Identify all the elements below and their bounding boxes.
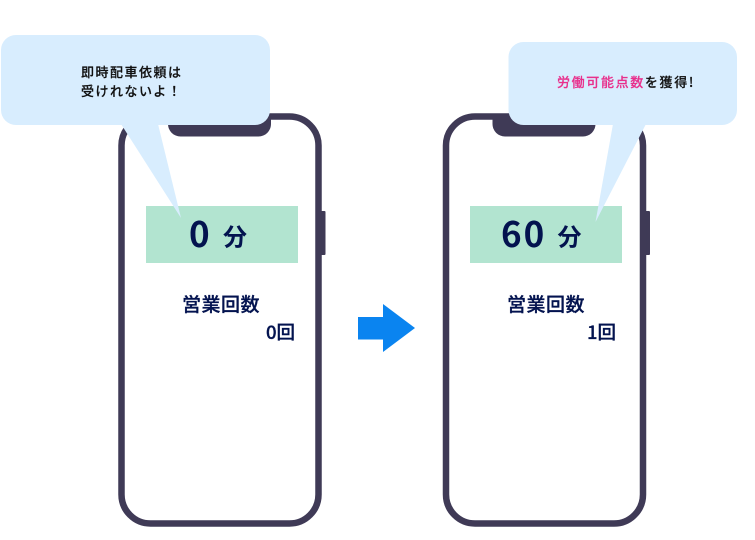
bubble body — [1, 35, 270, 125]
sales count value: 0回 — [266, 319, 295, 345]
phone body — [446, 116, 643, 524]
minutes unit: 分 — [223, 218, 247, 252]
phone body — [122, 116, 318, 524]
bubble tail — [596, 124, 646, 222]
phone notch — [492, 116, 596, 136]
callout: right speech bubble — [508, 42, 737, 222]
minutes value: 0 — [189, 207, 210, 258]
sales count value: 1回 — [587, 319, 616, 345]
arrow — [358, 304, 415, 352]
panel: left phone — [122, 116, 326, 524]
bubble text: 即時配車依頼は — [81, 62, 183, 81]
bubble body — [508, 42, 737, 125]
panel: right phone — [446, 116, 650, 524]
minutes unit: 分 — [558, 218, 582, 252]
phone side button — [320, 211, 326, 255]
phone notch — [168, 116, 271, 136]
bubble text: 労働可能点数を獲得! — [557, 72, 695, 91]
bubble text: 受けれないよ！ — [81, 81, 182, 100]
sales count label: 営業回数 — [182, 290, 260, 317]
callout: left speech bubble — [1, 35, 270, 218]
minutes band — [146, 206, 298, 263]
phone side button — [644, 211, 650, 255]
minutes value: 60 — [501, 207, 546, 258]
sales count label: 営業回数 — [507, 290, 585, 317]
minutes band — [470, 206, 622, 263]
bubble tail — [121, 124, 181, 218]
